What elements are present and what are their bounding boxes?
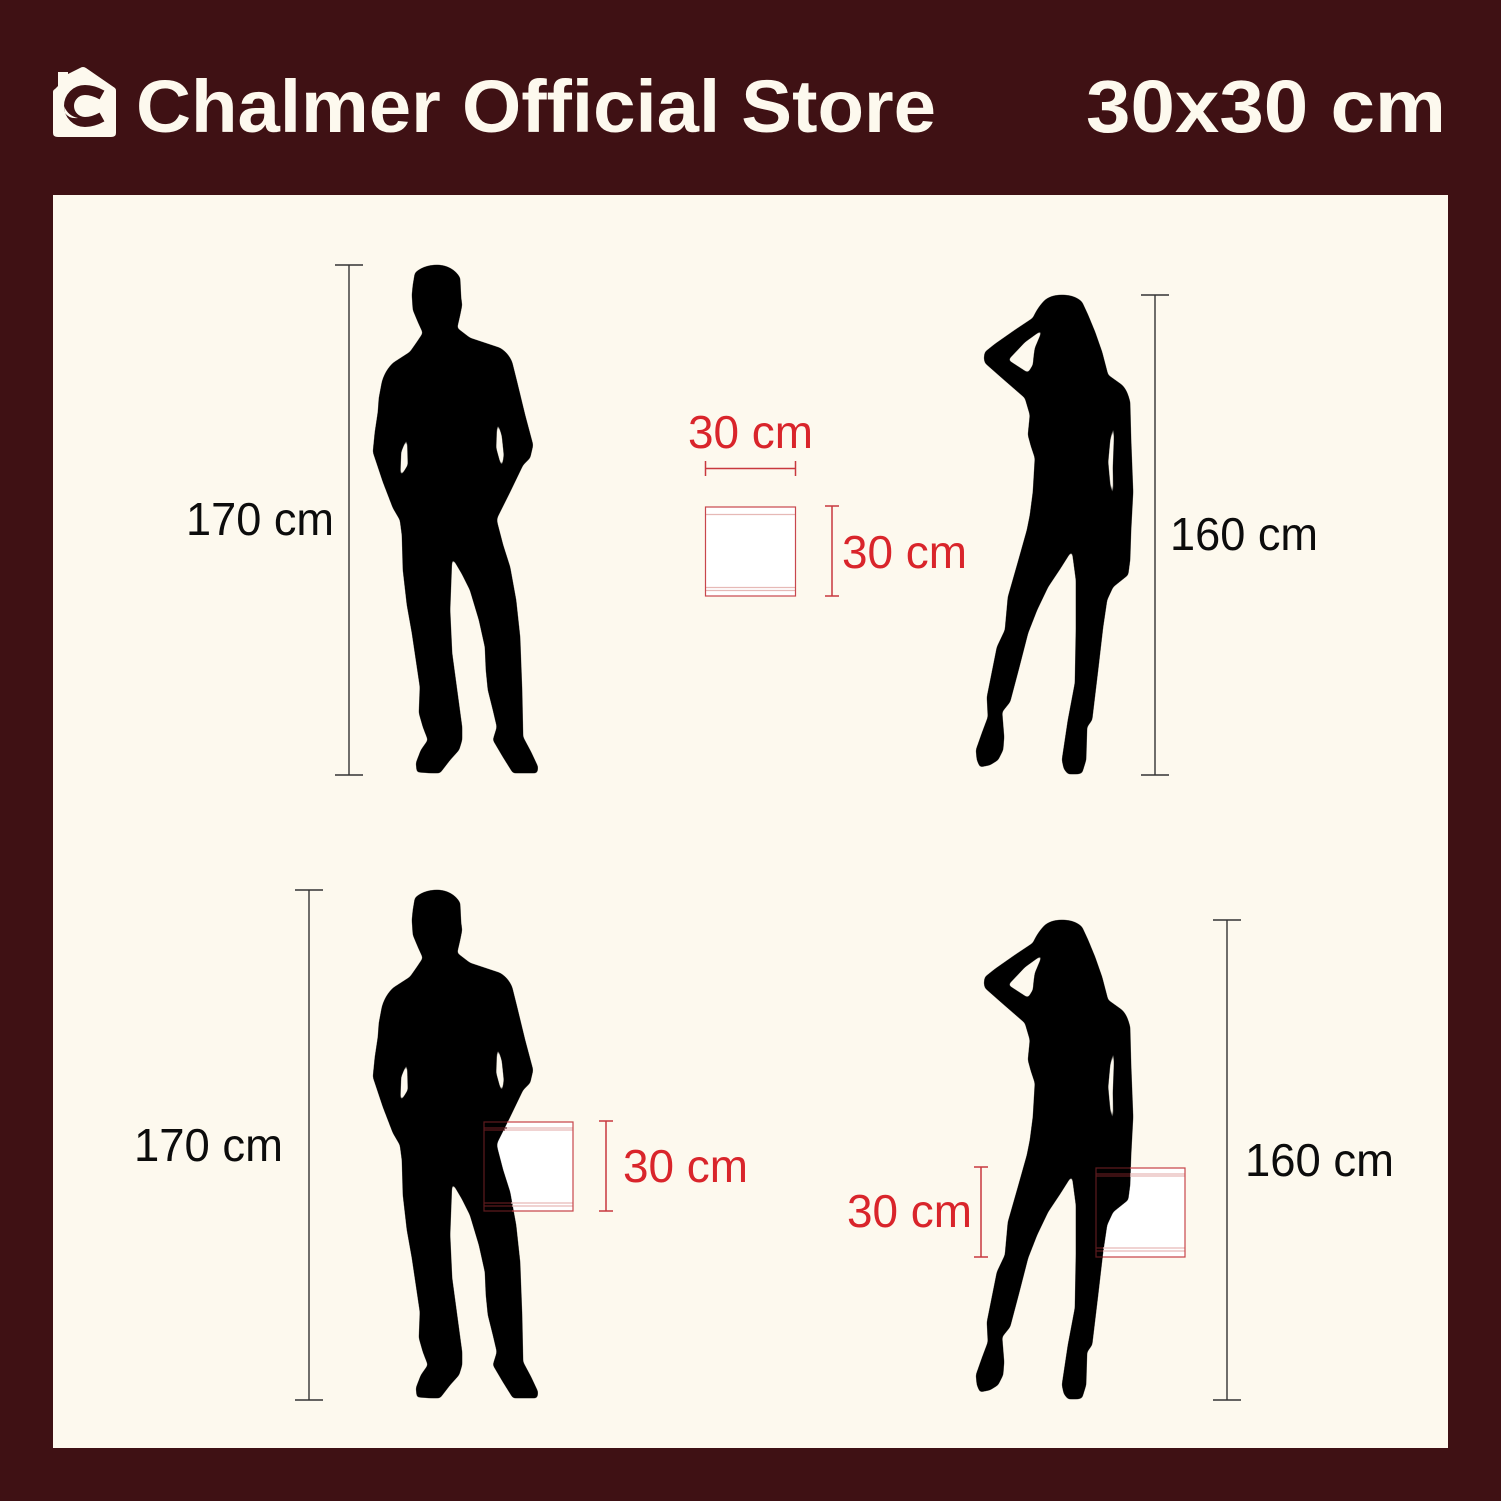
label: 160 cm top: 160 cm — [1170, 508, 1318, 560]
ruler: woman height bottom — [1213, 920, 1241, 1400]
icon: Chalmer house logo — [53, 67, 116, 137]
label: 160 cm bottom: 160 cm — [1245, 1134, 1394, 1186]
towel outline beside woman — [1096, 1168, 1185, 1257]
label: 170 cm top: 170 cm — [186, 493, 334, 545]
silhouette: man bottom — [373, 890, 538, 1398]
silhouette: man top — [373, 265, 538, 773]
label: 30 cm beside man: 30 cm — [623, 1140, 748, 1192]
ruler: height of towel — [825, 506, 839, 596]
towel outline beside man — [484, 1122, 573, 1211]
towel fill beside man — [484, 1122, 573, 1211]
product: towel front view — [706, 507, 796, 596]
ruler: man height bottom — [295, 890, 323, 1400]
label: 30 cm height: 30 cm — [842, 526, 967, 578]
panel: cream size chart — [53, 195, 1448, 1448]
silhouette: woman top — [976, 295, 1133, 774]
label: 30 cm width: 30 cm — [688, 406, 813, 458]
ruler: man height top — [335, 265, 363, 775]
silhouette: woman bottom — [976, 920, 1133, 1399]
ruler: towel beside woman — [974, 1167, 988, 1257]
label: 170 cm bottom: 170 cm — [134, 1119, 283, 1171]
towel fill beside woman — [1096, 1168, 1185, 1257]
ruler: woman height top — [1141, 295, 1169, 775]
size heading: 30x30 cm — [1086, 65, 1446, 148]
ruler: width — [706, 461, 796, 476]
ruler: towel beside man — [599, 1121, 613, 1211]
title: Chalmer Official Store — [136, 65, 936, 148]
label: 30 cm beside woman: 30 cm — [847, 1185, 972, 1237]
